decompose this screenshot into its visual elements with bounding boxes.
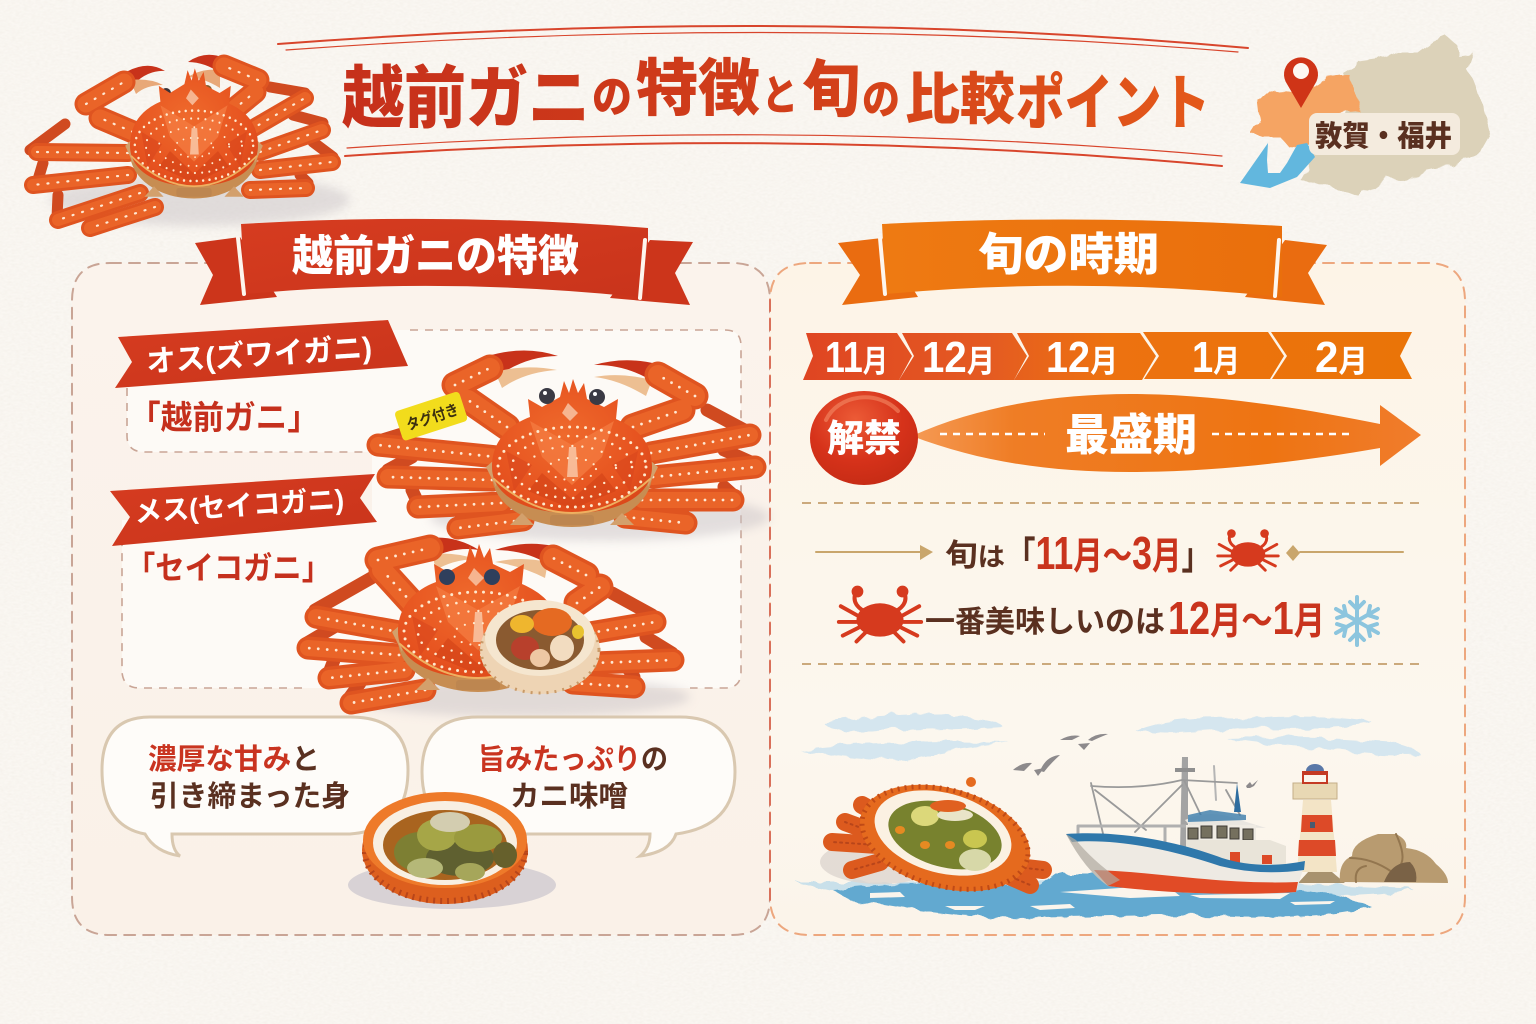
roe section	[480, 600, 600, 694]
month timeline: 12月	[922, 333, 995, 382]
sea	[795, 873, 1412, 918]
month timeline: 12月	[1046, 333, 1118, 382]
title: 特徴	[636, 55, 760, 124]
heading ribbon: season: 旬の時期	[978, 229, 1159, 280]
panel: season	[770, 263, 1465, 935]
speech bubble: crab miso	[422, 717, 735, 856]
shell platter	[820, 767, 1043, 909]
label: Echizen crab: 「越前ガニ」	[129, 399, 319, 436]
heading ribbon: features: 越前ガニの特徴	[292, 233, 579, 281]
speech bubble: crab miso: カニ味噌	[510, 780, 628, 813]
map sea	[1240, 143, 1315, 188]
illustration: harbour scene	[795, 714, 1448, 918]
title: の	[592, 73, 632, 122]
speech bubble: sweet meat	[102, 717, 408, 856]
map region: Echizen	[1250, 75, 1360, 148]
decorative title lines	[278, 26, 1248, 166]
month timeline: 11月	[825, 333, 888, 382]
heading ribbon: season	[838, 219, 1327, 305]
map label: 敦賀・福井	[1315, 120, 1452, 153]
line: best season: 一番美味しいのは	[925, 606, 1165, 639]
title: 越前ガニ	[342, 61, 590, 137]
map land	[1300, 35, 1490, 197]
month timeline: 2月	[1315, 333, 1368, 382]
month timeline	[803, 332, 1412, 382]
speech bubble: sweet meat: 引き締まった身	[150, 780, 350, 813]
title: ポイント	[1016, 70, 1210, 137]
panel: features	[72, 263, 770, 935]
line: best season	[839, 586, 1325, 644]
ribbon: male	[115, 320, 408, 388]
title: の	[862, 76, 900, 123]
month timeline: 1月	[1192, 333, 1240, 382]
arrow: peak season	[912, 394, 1421, 472]
speech bubble: crab miso: 旨みたっぷりの	[478, 743, 668, 776]
title: と	[762, 72, 798, 119]
inner white card	[122, 330, 741, 688]
clouds	[800, 714, 1420, 760]
ribbon: male: オス(ズワイガニ)	[145, 331, 373, 379]
map: Tsuruga, Fukui	[1240, 35, 1490, 197]
rocks	[1298, 834, 1448, 883]
badge: season opening: 解禁	[827, 418, 901, 459]
ribbon: female	[110, 474, 377, 546]
yellow tag: タグ付き	[404, 400, 461, 434]
label: Seiko crab: 「セイコガニ」	[126, 550, 331, 586]
line: season range	[816, 527, 1403, 579]
illustration: crab shell with miso	[348, 792, 556, 909]
icon: snowflake	[1336, 597, 1378, 645]
badge: season opening	[810, 391, 918, 485]
line: season range: 旬は	[945, 538, 1005, 573]
ribbon: female: メス(セイコガニ)	[133, 484, 345, 528]
title: 比較	[905, 68, 1015, 131]
heading ribbon: features	[195, 219, 693, 305]
illustration: top crab	[30, 55, 350, 228]
arrow: peak season: 最盛期	[1065, 411, 1197, 460]
lighthouse	[1293, 764, 1337, 872]
map pin	[1284, 57, 1318, 108]
title	[342, 55, 1210, 137]
speech bubble: sweet meat: 濃厚な甘みと	[148, 743, 320, 776]
line: best season: 12月〜1月	[1168, 592, 1325, 644]
birds	[1013, 734, 1258, 788]
yellow tag	[394, 391, 468, 441]
illustration: female crab	[307, 538, 690, 717]
line: season range: 「11月〜3月」	[1006, 527, 1211, 579]
title: 旬	[802, 56, 860, 125]
boat	[1066, 757, 1305, 894]
illustration: male crab	[376, 350, 770, 541]
